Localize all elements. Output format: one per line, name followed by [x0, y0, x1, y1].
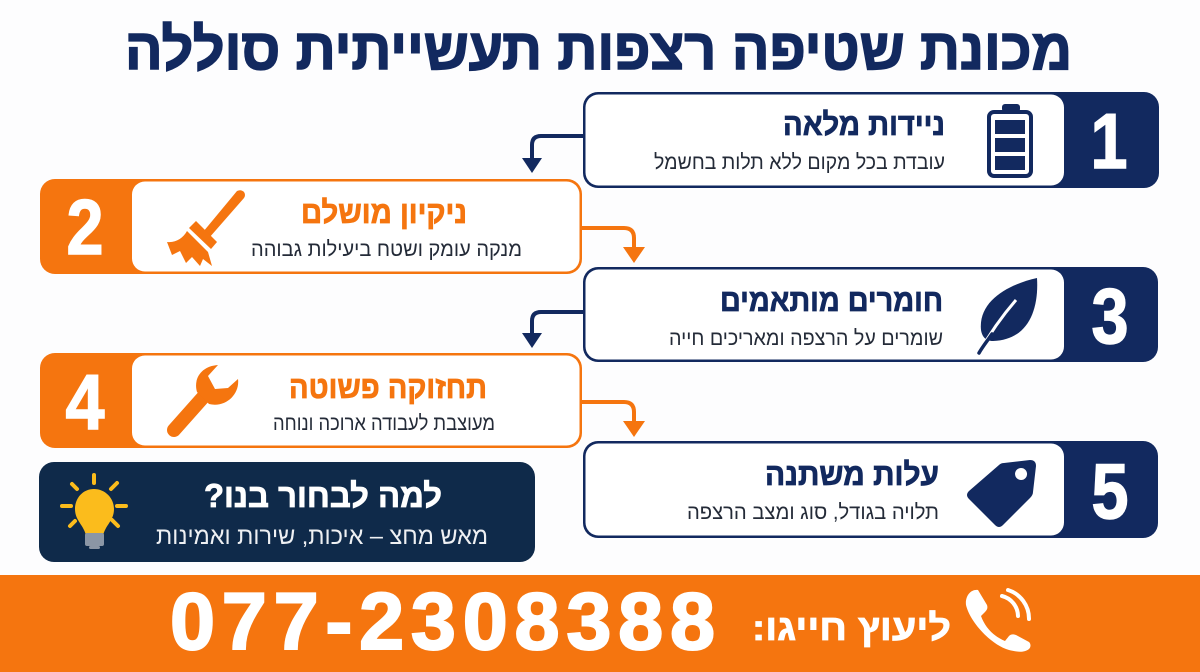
- text: step 2: מנקה עומק ושטח ביעילות גבוהה: [251, 238, 522, 261]
- arrow: step 4 to step 5: [582, 402, 645, 437]
- arrow: step 3 to step 4: [522, 312, 583, 348]
- text: why choose us: מאש מחצ – איכות, שירות ואמינות: [156, 523, 488, 550]
- text: step 1: עובדת בכל מקום ללא תלות בחשמל: [654, 151, 945, 174]
- icon: battery: [989, 104, 1031, 176]
- text: step 3: שומרים על הרצפה ומאריכים חייה: [669, 327, 943, 350]
- text: step 4: מעוצבת לעבודה ארוכה ונוחה: [273, 412, 495, 435]
- label: free consultation: ליעוץ חייגו:: [752, 607, 951, 648]
- panel: step 2: [40, 179, 582, 274]
- icon: price tag: [967, 460, 1036, 527]
- step number 2: 2: [66, 183, 104, 271]
- heading: step 1: ניידות מלאה: [783, 107, 945, 142]
- title: מכונת שטיפה רצפות תעשייתית סוללה: [125, 17, 1072, 82]
- step number 3: 3: [1092, 272, 1128, 360]
- panel: step 5: [583, 441, 1158, 538]
- arrow: step 1 to step 2: [522, 136, 583, 173]
- contact bar: [0, 575, 1200, 672]
- arrow: step 2 to step 3: [582, 228, 645, 263]
- panel: step 4: [40, 353, 582, 448]
- panel: why choose us: [39, 462, 535, 562]
- step number 5: 5: [1092, 447, 1128, 535]
- icon: wrench: [174, 365, 238, 430]
- heading: step 5: עלות משתנה: [765, 457, 939, 492]
- heading: step 4: תחזוקה פשוטה: [289, 370, 487, 405]
- heading: step 2: ניקיון מושלם: [301, 195, 467, 230]
- heading: why choose us: למה לבחור בנו?: [204, 477, 442, 514]
- icon: leaf: [979, 278, 1037, 353]
- panel: step 3: [583, 267, 1158, 362]
- icon: phone: [966, 590, 1030, 652]
- icon: broom: [167, 190, 245, 266]
- phone number: 077-2308388: [170, 577, 715, 667]
- step number 4: 4: [66, 358, 104, 446]
- heading: step 3: חומרים מותאמים: [720, 283, 943, 318]
- panel: step 1: [583, 92, 1159, 188]
- icon: light bulb: [62, 475, 126, 549]
- step number 1: 1: [1090, 97, 1128, 185]
- text: step 5: תלויה בגודל, סוג ומצב הרצפה: [687, 501, 939, 524]
